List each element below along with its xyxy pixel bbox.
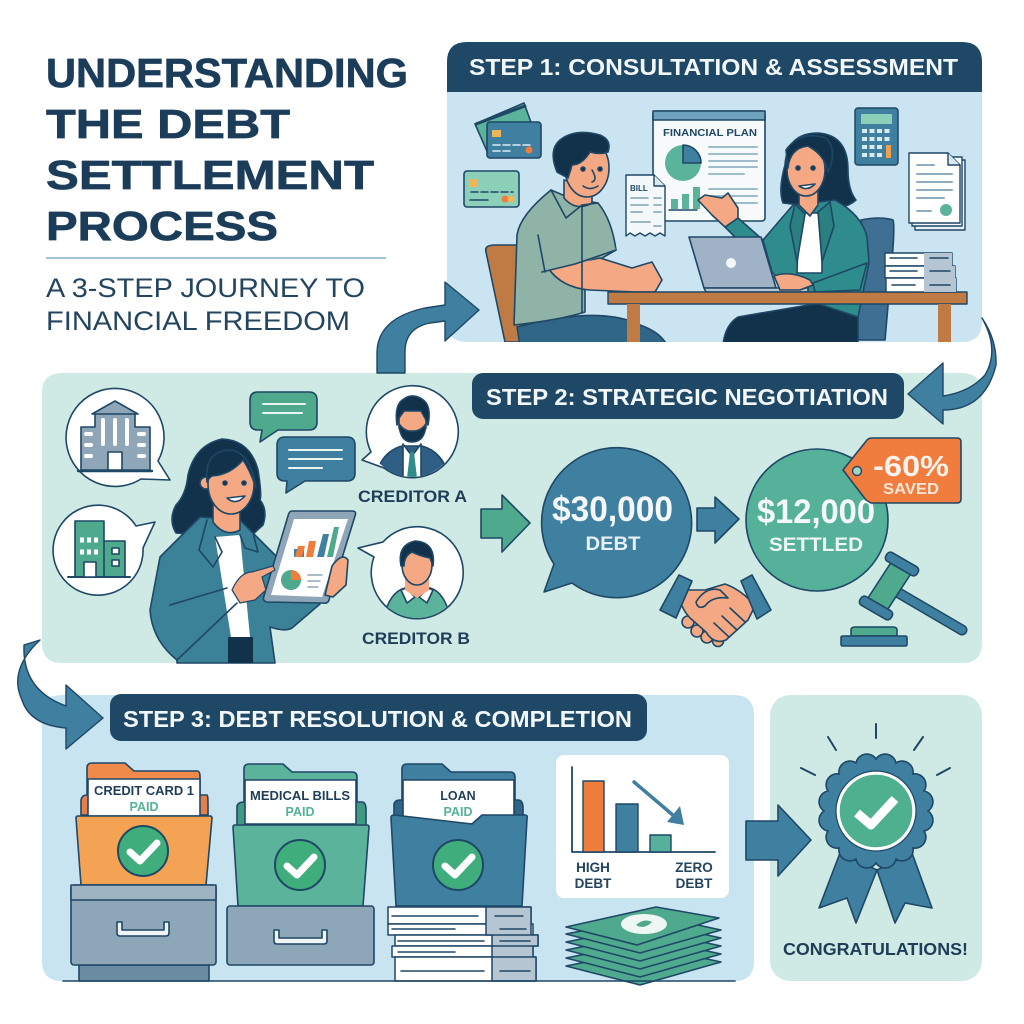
arrow: step 2 up to step 1 (377, 282, 479, 373)
woman consultant (698, 133, 869, 345)
icon: gavel (841, 551, 962, 646)
title block (46, 50, 408, 249)
folder: medical bills (233, 764, 369, 906)
folder: loan: LOAN (440, 789, 476, 803)
chart card: ZERO (675, 860, 713, 875)
woman negotiator with tablet (150, 439, 320, 663)
step 3 header pill: STEP 3: DEBT RESOLUTION & COMPLETION (123, 706, 632, 732)
subtitle: FINANCIAL FREEDOM (46, 306, 350, 336)
debt bubble (542, 448, 692, 598)
step 2 header pill: STEP 2: STRATEGIC NEGOTIATION (486, 384, 888, 410)
panel: step 2 negotiation (42, 373, 982, 663)
arrow: debt to settled (697, 497, 739, 543)
bill receipt (626, 175, 665, 236)
arrow: step 1 down to step 2 (908, 318, 996, 424)
rosette badge (819, 754, 933, 868)
step 1 header bar: STEP 1: CONSULTATION & ASSESSMENT (469, 54, 958, 80)
speech bubble blue (277, 437, 355, 493)
creditor B portrait (358, 527, 463, 625)
man at the desk (486, 132, 667, 345)
folder: medical bills: PAID (286, 805, 314, 819)
title block: UNDERSTANDING (46, 50, 408, 96)
folder: credit card 1: PAID (130, 800, 158, 814)
debt bubble: $30,000 (552, 490, 673, 529)
arrow: chart to badge (746, 805, 811, 876)
financial plan document: FINANCIAL PLAN (663, 127, 757, 139)
icon: cash stack (566, 907, 721, 985)
title block: SETTLEMENT (46, 152, 374, 198)
tablet (232, 511, 356, 603)
debt bubble: DEBT (586, 534, 641, 555)
laptop (689, 237, 867, 292)
subtitle (46, 273, 365, 336)
step 2 header pill (472, 373, 904, 419)
chart card: DEBT (575, 876, 612, 891)
settled circle: SETTLED (769, 535, 863, 556)
icon: credit cards (475, 103, 541, 158)
paper stack (388, 907, 538, 981)
arrow: step 2 down to step 3 (18, 640, 103, 749)
icon: handshake (660, 575, 771, 646)
creditor B label: CREDITOR B (362, 629, 470, 648)
rays (801, 724, 950, 775)
desk (608, 292, 967, 342)
panel: step 3 resolution (42, 694, 754, 985)
icon: bank bubble (66, 388, 170, 486)
folder: medical bills: MEDICAL BILLS (250, 789, 350, 803)
chart card (556, 755, 729, 898)
panel: step 1 consultation (447, 42, 982, 345)
financial plan document (653, 111, 765, 221)
chart card: DEBT (676, 876, 713, 891)
drawer 2 (227, 906, 374, 965)
panel: congratulations (770, 695, 982, 981)
folder: credit card 1 (76, 763, 212, 885)
icon: office bubble (53, 505, 155, 595)
ribbon tails (819, 853, 932, 923)
creditor A label: CREDITOR A (358, 487, 467, 506)
title block: THE DEBT (46, 101, 290, 147)
settled circle: $12,000 (757, 493, 875, 531)
icon: book stack (885, 253, 956, 292)
step 3 header pill (110, 694, 647, 741)
title block: PROCESS (46, 203, 278, 249)
drawer 1 (71, 885, 216, 981)
icon: paper stack (909, 153, 965, 230)
icon: calculator (855, 108, 898, 165)
settled circle (746, 449, 888, 591)
subtitle: A 3-STEP JOURNEY TO (46, 273, 365, 303)
arrow: green into debt bubble (481, 495, 530, 552)
step 1 header bar (447, 42, 982, 92)
icon: green credit card (464, 171, 519, 207)
savings tag: -60% (873, 451, 949, 483)
folder: loan (391, 764, 527, 906)
congratulations label: CONGRATULATIONS! (783, 939, 968, 959)
savings tag (843, 438, 961, 503)
chart card: HIGH (576, 860, 610, 875)
second chair (855, 218, 894, 340)
bill receipt: BILL (630, 184, 648, 193)
folder: credit card 1: CREDIT CARD 1 (94, 784, 194, 798)
speech bubble green (250, 392, 317, 442)
creditor A portrait (362, 386, 458, 480)
folder: loan: PAID (444, 805, 472, 819)
savings tag: SAVED (883, 481, 939, 498)
